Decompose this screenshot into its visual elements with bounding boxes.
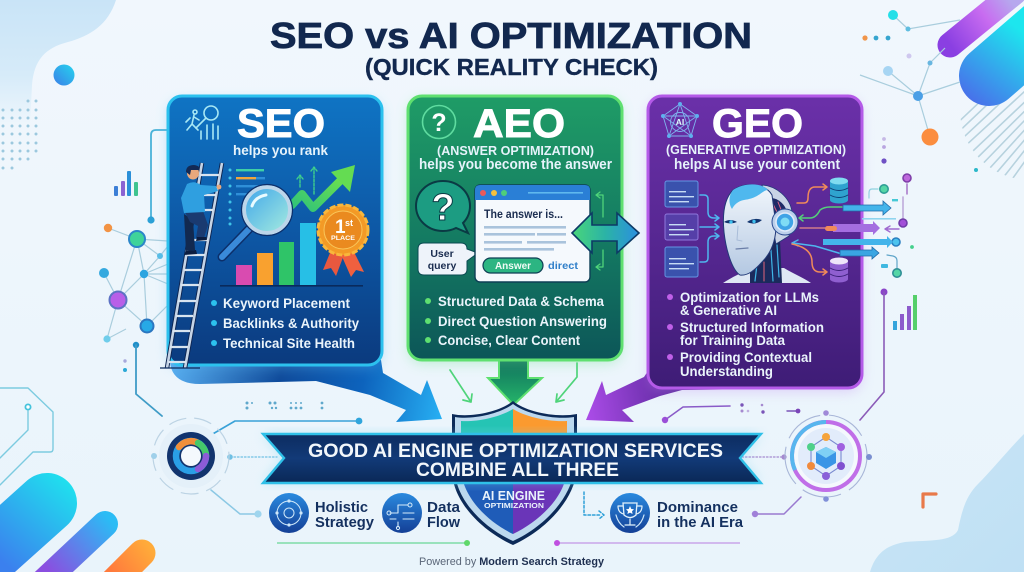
connectors: right ring [742,454,801,517]
list: SEO bullets [211,296,359,351]
shield: AI engine optimization [452,401,577,545]
subheading: generative optimization: (GENERATIVE OPTIMIZATION) [666,142,846,157]
background blob: bottom right [870,434,1024,572]
browser window: answer card: direct [548,260,579,272]
icon: question mark ring: ? [431,109,447,137]
icons: documents [665,181,698,277]
circuit line: left top [147,130,168,224]
button: answer: Answer [495,261,531,272]
circuit line: left lower [123,342,162,416]
list: GEO bullets: for Training Data [680,333,785,348]
icon: SEO runner and magnifier [186,106,218,139]
mini bar chart: left [114,171,138,196]
mini bar chart: right [893,295,917,330]
dotted decoration above right ring [662,403,800,423]
subtitle: (QUICK REALITY CHECK) [365,54,658,80]
data list lines [228,168,265,226]
circuit traces: bottom left [0,388,53,485]
icon: right ring network cube [785,410,872,502]
corner bracket: orange [923,494,936,507]
subheading: helps you rank: helps you rank [233,142,328,158]
arrows: documents to robot [700,195,719,262]
footer: Powered by Modern Search Strategy [419,556,605,568]
decoration: dot grid [2,100,38,170]
icon: magnifying glass [222,184,292,257]
list: AEO bullets [425,294,607,348]
icon: question speech bubble: ? [431,187,455,229]
background blob: top left [0,0,116,125]
list: SEO bullets: Keyword Placement [223,296,350,311]
badge: 1st place: st [345,218,353,228]
list: SEO bullets: Backlinks & Authority [223,316,359,331]
list: GEO bullets: & Generative AI [680,303,777,318]
list: GEO bullets: Providing Contextual [680,350,812,365]
list: GEO bullets [667,290,824,379]
icon: data flow [382,493,422,533]
list: AEO bullets: Direct Question Answering [438,314,607,329]
callout: user query [418,243,478,275]
item: dominance in the AI era: Dominance [657,499,738,516]
icon: question speech bubble [416,181,470,233]
item: data flow: Data [427,499,461,516]
icon: database bottom [830,258,848,282]
banner: good AI engine optimization services [263,434,761,483]
icon: question mark ring [422,106,456,138]
dashed arrow: shield to dominance [584,492,604,519]
panel: SEO [160,96,382,369]
arrow: rising trend [292,165,355,208]
decorative bars: bottom left [0,503,142,572]
decorative bars: top right [950,0,1024,76]
banner text [308,441,723,481]
network graph: top right [860,10,978,172]
circuit details: right of GEO panel [869,137,914,277]
shield label: OPTIMIZATION [484,503,544,510]
illustration: ladder [160,163,222,368]
banner text: COMBINE ALL THREE [416,460,619,481]
circuit line: right lower [860,288,888,420]
bracket arrows beside browser [596,192,603,270]
icon: left ring [151,418,229,494]
connector arrow: AEO to shield [450,356,577,405]
item: data flow: Flow [427,514,460,531]
illustration: person climbing [181,165,221,255]
data arrows: GEO to right side [823,201,896,259]
panel: AEO [408,96,622,364]
list: AEO bullets: Structured Data & Schema [438,294,604,309]
list: GEO bullets: Understanding [680,364,773,379]
item: dominance in the AI era: in the AI Era [657,514,744,531]
subheading: helps AI use your content: helps AI use your content [674,157,840,173]
accent line: green [277,540,470,546]
double arrow: AEO to GEO [572,213,639,253]
list: SEO bullets: Technical Site Health [223,336,355,351]
decoration: top left dot [54,64,74,86]
title: SEO vs AI OPTIMIZATION [270,15,752,56]
item: holistic strategy: Holistic [315,499,368,516]
browser window: answer card: The answer is... [484,209,563,221]
dotted decoration above left ring [246,402,323,410]
heading: GEO: GEO [712,102,803,146]
badge: 1st place: PLACE [331,235,356,242]
heading: AEO: AEO [473,102,565,146]
subheading: answer optimization: (ANSWER OPTIMIZATION) [437,143,594,158]
connectors: left ring [208,418,362,518]
list: GEO bullets: Structured Information [680,320,824,335]
illustration: AI robot head [723,184,811,283]
badge: 1st place: 1 [335,217,346,238]
list: GEO bullets: Optimization for LLMs [680,290,819,305]
heading: SEO: SEO [237,102,325,146]
callout: user query: query [428,260,456,272]
connector arrow: GEO to shield [586,340,850,422]
item: holistic strategy: Strategy [315,514,375,531]
connector arrow: SEO to shield [170,360,442,422]
item: dominance in the AI era [610,493,744,533]
list: AEO bullets: Concise, Clear Content [438,333,580,348]
item: data flow [382,493,461,533]
icon: AI network: AI [676,117,684,127]
shield label: AI ENGINE [482,488,545,503]
banner text: GOOD AI ENGINE OPTIMIZATION SERVICES [308,441,723,462]
subheading: helps you become the answer: helps you become the answer [419,157,612,173]
arrows: robot to data [792,184,842,275]
browser window: answer card [475,185,590,282]
decorative hatch: top right [960,91,1024,178]
icon: database top [830,178,848,204]
icon: holistic strategy [269,493,309,533]
callout: user query: User [430,248,454,260]
bar chart: rising bars [220,223,363,287]
panel: GEO [648,96,862,392]
item: holistic strategy [269,493,375,533]
icon: trophy [610,493,650,533]
icon: AI network [661,102,699,138]
network graph: left [99,224,168,343]
badge: 1st place [318,205,368,277]
accent line: purple [554,540,740,546]
shield label [482,488,545,510]
